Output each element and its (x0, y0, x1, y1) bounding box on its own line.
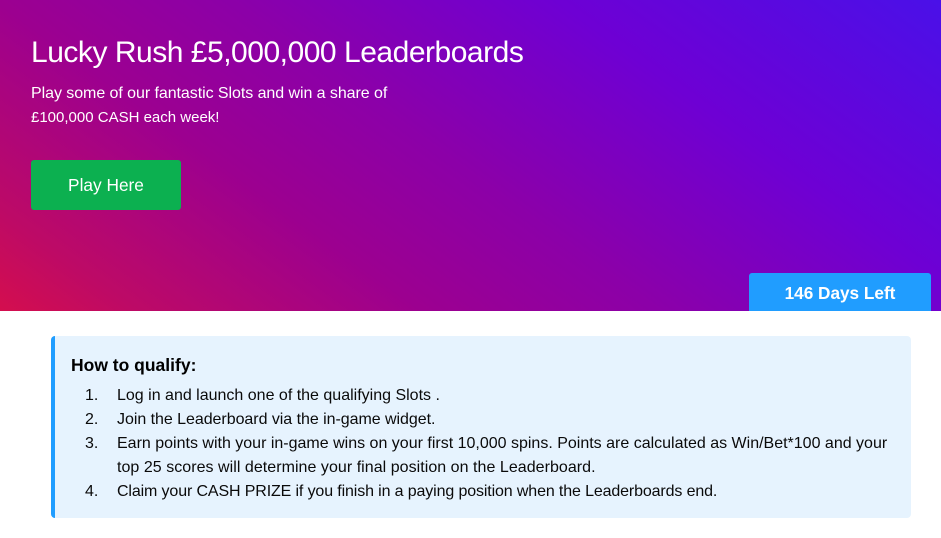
badge: days left: 146 Days Left (785, 283, 895, 303)
button: play here (31, 160, 181, 210)
heading: how to qualify: How to qualify: (71, 355, 196, 375)
step 3 (85, 435, 887, 476)
step 1: Log in and launch one of the qualifying Slots . (117, 387, 440, 404)
panel: how to qualify (51, 336, 911, 518)
subtitle text: £100,000 CASH each week! (31, 109, 219, 126)
button: play here: Play Here (68, 175, 144, 195)
step 2: Join the Leaderboard via the in-game widget. (117, 411, 435, 428)
step 1: 1. (85, 387, 98, 404)
subtitle text (31, 85, 388, 126)
step 3: 3. (85, 435, 98, 452)
step 4: 4. (85, 483, 98, 500)
step 2: 2. (85, 411, 98, 428)
title: Lucky Rush £5,000,000 Leaderboards (31, 36, 523, 69)
badge: days left (749, 273, 931, 311)
step 4: Claim your CASH PRIZE if you finish in a paying position when the Leaderboards end. (117, 483, 717, 500)
step 3: Earn points with your in-game wins on your first 10,000 spins. Points are calculated as Win/Bet*100 and your (117, 435, 887, 452)
step 3: top 25 scores will determine your final position on the Leaderboard. (117, 459, 596, 476)
panel: hero banner (0, 0, 941, 311)
subtitle text: Play some of our fantastic Slots and win a share of (31, 85, 387, 102)
